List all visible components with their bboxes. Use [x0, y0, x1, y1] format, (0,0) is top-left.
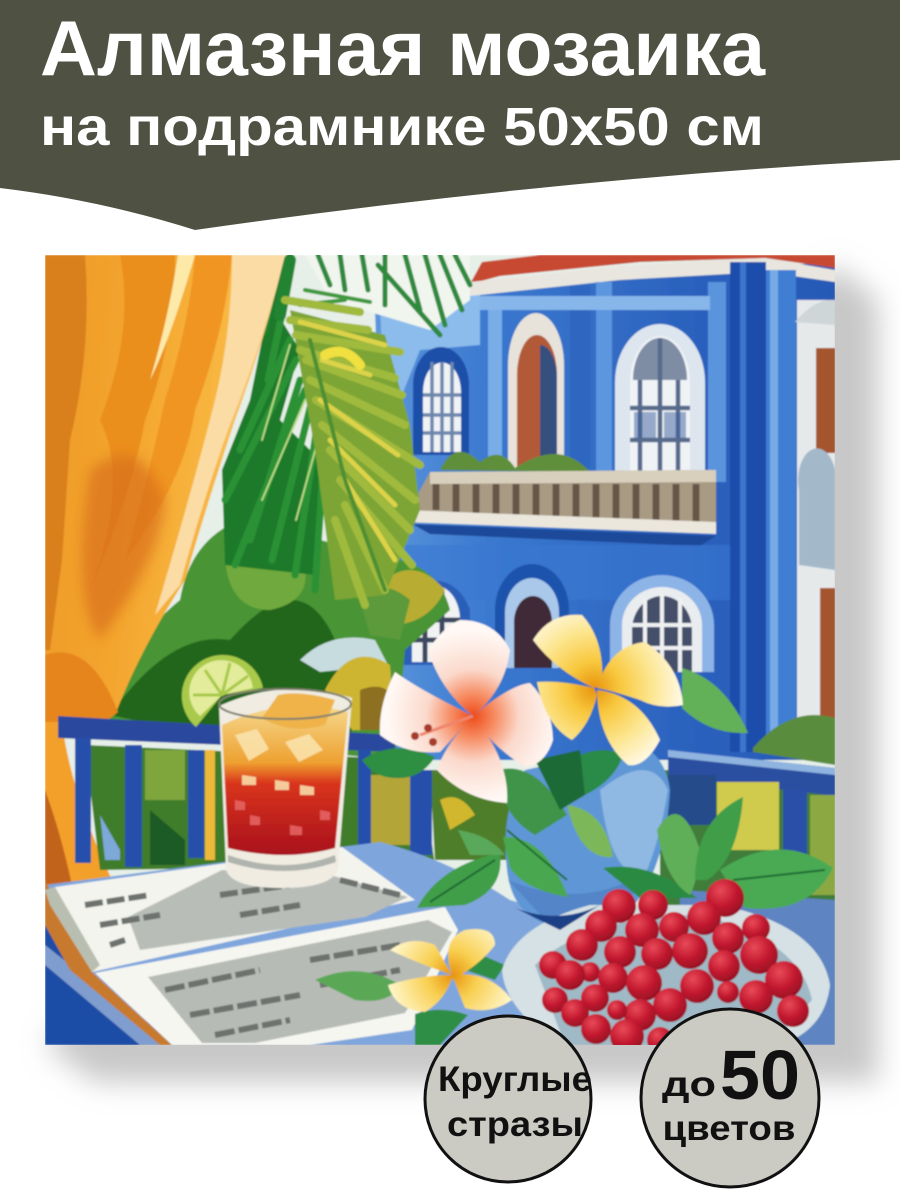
book — [45, 847, 458, 1045]
tree and garden foliage — [90, 520, 450, 760]
subtitle: на подрамнике 50х50 см — [40, 97, 764, 157]
title: Алмазная мозаика — [40, 4, 766, 92]
yellow-green leaflet mass — [290, 310, 420, 600]
vase-plate dark base — [515, 905, 600, 930]
lower arches — [400, 564, 714, 672]
cranberries — [539, 879, 809, 1053]
top-right frond, pale with green stripes — [305, 255, 470, 330]
right-side wing — [795, 300, 835, 750]
badge: up to 50 colours: цветов — [662, 1109, 796, 1148]
dark hanging leaflets — [222, 255, 320, 575]
painting background — [64, 255, 835, 906]
badge: up to 50 colours — [641, 1009, 819, 1187]
header band — [0, 0, 900, 230]
behind-railing foliage — [85, 745, 835, 910]
yellow flower — [533, 615, 683, 765]
badge: up to 50 colours: 50 — [720, 1036, 800, 1114]
drink glass — [182, 655, 352, 888]
table — [45, 842, 835, 1045]
palm fronds — [222, 255, 470, 605]
foliage on balcony — [440, 452, 590, 472]
yellow-green leaflets — [285, 300, 420, 605]
badge: up to 50 colours: до — [662, 1065, 716, 1104]
small flower on book — [315, 929, 512, 1045]
railing — [56, 714, 835, 898]
hibiscus flower — [380, 620, 553, 803]
painting — [45, 255, 835, 1053]
door: upper arch — [508, 313, 564, 470]
vase — [505, 745, 670, 925]
badge: round rhinestones: стразы — [447, 1105, 583, 1144]
blue ground-floor shading — [400, 545, 730, 600]
lime slice — [182, 655, 263, 727]
balcony — [405, 470, 716, 546]
badge: round rhinestones: Круглые — [438, 1060, 592, 1099]
curtain — [45, 255, 285, 885]
plate — [502, 905, 830, 1045]
window: upper right — [615, 324, 705, 472]
building — [375, 255, 835, 760]
window: left — [413, 347, 469, 455]
leaves — [362, 668, 833, 909]
canvas shadow — [45, 265, 878, 1082]
badge: round rhinestones — [425, 1016, 592, 1182]
